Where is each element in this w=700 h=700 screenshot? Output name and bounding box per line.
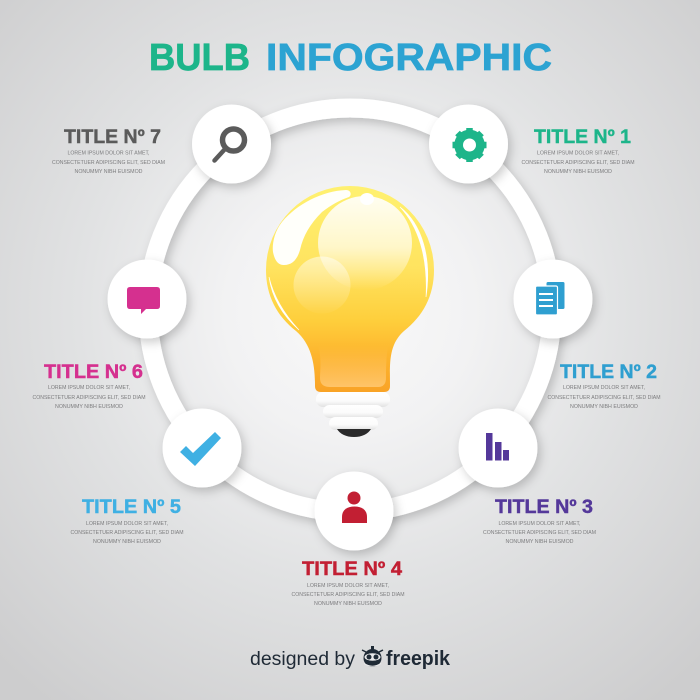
block: title 6: [32, 361, 146, 410]
block: title 5: CONSECTETUER ADIPISCING ELIT, SED DIAM: [70, 530, 184, 536]
icon: bar chart: [486, 433, 509, 460]
block: title 2: CONSECTETUER ADIPISCING ELIT, SED DIAM: [548, 395, 661, 401]
icon: documents: [536, 282, 564, 315]
icon: gear: [452, 128, 486, 162]
right rim highlight: [400, 207, 428, 297]
node 4: person: [314, 472, 394, 550]
footer credit: freepik: [386, 648, 451, 670]
footer credit: [250, 646, 451, 670]
ring connecting the nodes: [148, 108, 552, 512]
block: title 2: [548, 361, 661, 410]
footer credit: designed by: [250, 649, 356, 670]
block: title 2: TITLE Nº 2: [560, 361, 657, 383]
icon: person: [342, 492, 367, 523]
block: title 7: CONSECTETUER ADIPISCING ELIT, SED DIAM: [52, 160, 165, 166]
block: title 3: TITLE Nº 3: [495, 496, 593, 518]
block: title 4: NONUMMY NIBH EUISMOD: [314, 601, 382, 607]
lower-left rim highlight: [269, 277, 299, 330]
small top highlight: [360, 193, 374, 205]
node 3: bars: [458, 408, 538, 488]
block: title 7: NONUMMY NIBH EUISMOD: [74, 169, 142, 175]
block: title 4: [292, 558, 405, 607]
node 5: check: [162, 408, 242, 488]
title: BULB: [149, 37, 250, 79]
title: [149, 37, 552, 79]
icon: check mark: [180, 432, 221, 466]
block: title 6: CONSECTETUER ADIPISCING ELIT, SED DIAM: [32, 395, 146, 401]
node 1: gear: [429, 104, 508, 184]
node 7: magnifier: [192, 104, 271, 184]
block: title 7: [52, 126, 165, 175]
block: title 5: TITLE Nº 5: [82, 496, 181, 518]
icon: speech bubble: [127, 287, 160, 314]
block: title 1: TITLE Nº 1: [534, 126, 631, 148]
block: title 1: LOREM IPSUM DOLOR SIT AMET,: [537, 150, 619, 156]
block: title 2: NONUMMY NIBH EUISMOD: [570, 404, 638, 410]
icon: freepik logo: [362, 646, 383, 667]
block: title 5: NONUMMY NIBH EUISMOD: [93, 539, 161, 545]
block: title 6: TITLE Nº 6: [44, 361, 143, 383]
title: INFOGRAPHIC: [266, 37, 552, 79]
block: title 7: TITLE Nº 7: [64, 126, 161, 148]
block: title 3: LOREM IPSUM DOLOR SIT AMET,: [498, 521, 581, 527]
block: title 1: CONSECTETUER ADIPISCING ELIT, SED DIAM: [522, 160, 635, 166]
block: title 1: [522, 126, 635, 175]
block: title 4: TITLE Nº 4: [302, 558, 402, 580]
block: title 3: [483, 496, 596, 545]
block: title 6: LOREM IPSUM DOLOR SIT AMET,: [48, 385, 130, 391]
block: title 1: NONUMMY NIBH EUISMOD: [544, 169, 612, 175]
icon: magnifier: [214, 129, 244, 160]
block: title 7: LOREM IPSUM DOLOR SIT AMET,: [68, 150, 150, 156]
small glow: [294, 256, 350, 314]
top-left highlight: [273, 190, 351, 265]
bulb neck light area: [318, 346, 388, 387]
block: title 3: CONSECTETUER ADIPISCING ELIT, SED DIAM: [483, 530, 596, 536]
bulb glass: [266, 186, 434, 392]
large glow: [318, 196, 412, 290]
block: title 5: [70, 496, 184, 545]
bulb screw base: [316, 392, 390, 437]
block: title 5: LOREM IPSUM DOLOR SIT AMET,: [86, 521, 168, 527]
node 2: documents: [514, 260, 592, 338]
block: title 3: NONUMMY NIBH EUISMOD: [506, 539, 574, 545]
block: title 2: LOREM IPSUM DOLOR SIT AMET,: [563, 385, 645, 391]
block: title 4: LOREM IPSUM DOLOR SIT AMET,: [307, 583, 389, 589]
block: title 4: CONSECTETUER ADIPISCING ELIT, SED DIAM: [292, 592, 405, 598]
block: title 6: NONUMMY NIBH EUISMOD: [55, 404, 123, 410]
node 6: chat: [108, 260, 186, 338]
light bulb: [266, 186, 434, 437]
